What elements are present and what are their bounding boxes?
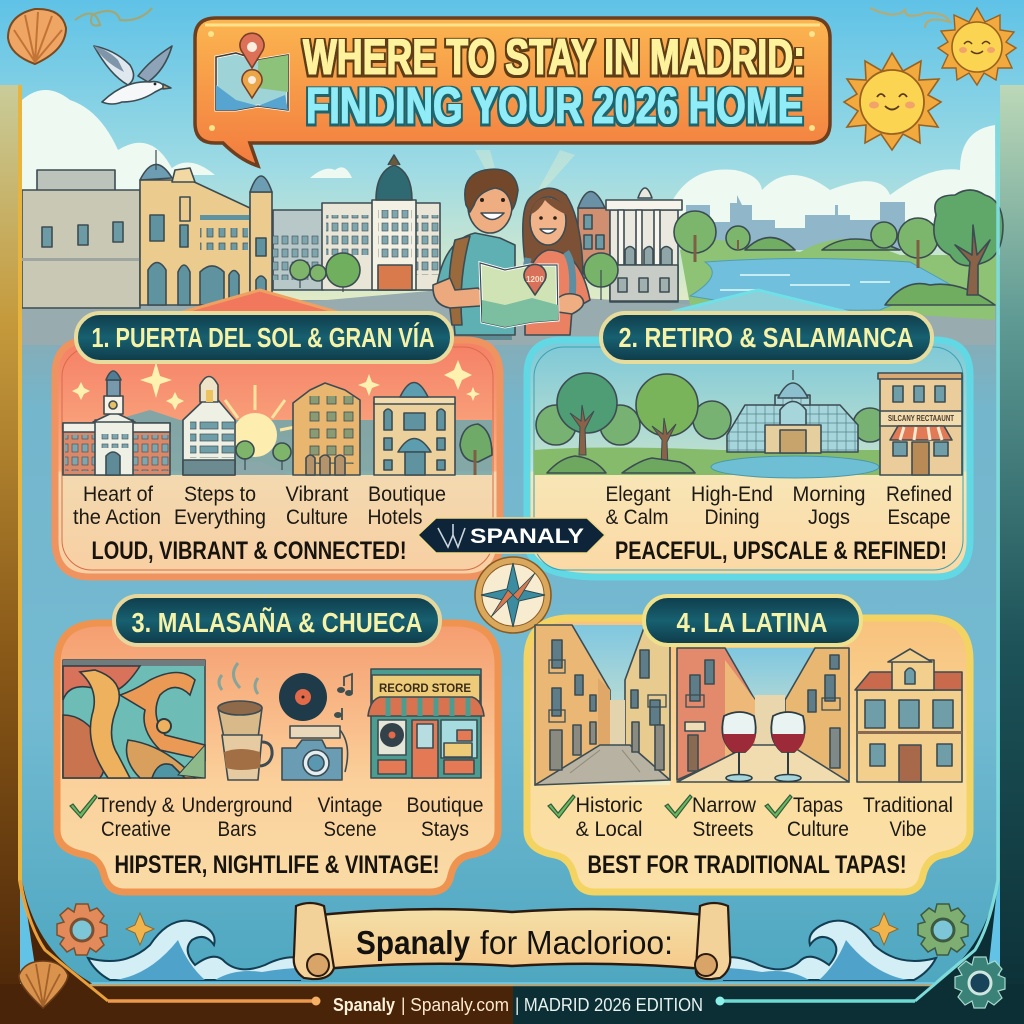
heading pill: 1. PUERTA DEL SOL & GRAN VÍA [92,322,434,353]
sun rays behind couple [475,150,575,205]
vinyl record [279,673,327,721]
brand name: SPANALY [470,525,584,548]
held map: 1200 [526,275,544,284]
man [433,169,518,340]
compass [475,557,551,633]
scroll text: for Maclorioo: [480,924,673,961]
heading pill [76,313,452,362]
feature labels: Everything [174,506,266,529]
feature labels: Boutique [406,794,484,817]
gear bottom right [955,957,1005,1008]
heading pill: 3. MALASAÑA & CHUECA [132,607,422,638]
held map [480,263,558,327]
street scene 2 [677,648,849,782]
feature labels [73,483,446,529]
panel 4: La Latina [527,596,970,892]
scroll text [356,924,673,961]
feature labels: Stays [421,818,469,841]
music notes [334,674,353,720]
big park tree [934,190,1003,295]
footer text [333,995,703,1015]
traditional house [855,649,962,782]
footer text: Spanaly [333,995,395,1015]
feature labels: Bars [218,818,256,841]
verdict: HIPSTER, NIGHTLIFE & VINTAGE! [114,851,440,879]
tree by museum [584,253,618,300]
gear left [57,904,107,955]
landmark: Metropolis building [273,155,440,292]
feature labels [606,483,952,529]
landmark: brick building [578,192,610,278]
waves left [88,921,302,980]
wine glasses [722,712,805,782]
feature labels: Scene [324,818,376,841]
sparkles [72,360,480,410]
left outer frame strip [0,85,20,1024]
landmark: white museum [606,188,682,302]
feature labels: Trendy & [98,794,174,817]
heading pill: 2. RETIRO & SALAMANCA [618,322,914,353]
feature labels [70,794,484,841]
building: orange hotel [293,383,360,475]
clouds [22,90,995,240]
feature labels [548,794,953,841]
feature labels: Traditional [863,794,953,817]
building: Gran Via tower [183,376,235,475]
title line 2: FINDING YOUR 2026 HOME [306,77,803,134]
building: boutique hotel [374,382,455,475]
heading pill [644,596,861,645]
feature labels: Boutique [368,483,446,506]
street scene 1 [535,625,670,785]
footer text: | MADRID 2026 EDITION [515,995,703,1015]
couple holding map [433,169,590,340]
feature labels: & Calm [606,506,668,529]
park and lake [674,211,1000,310]
verdict: PEACEFUL, UPSCALE & REFINED! [615,537,947,565]
decorative swirl top left [75,8,152,26]
feature labels: Creative [101,818,171,841]
scallop shell bottom left [19,961,68,1008]
footer text: | Spanaly.com [401,995,509,1015]
scene: ground and road [22,255,995,345]
small smiling sun [938,8,1016,85]
woman [520,188,590,335]
feature labels: Vibe [890,818,926,841]
feature labels: Culture [787,818,849,841]
title line 1: WHERE TO STAY IN MADRID: [303,29,805,85]
cyan frame line right [915,115,998,1001]
verdict: LOUD, VIBRANT & CONNECTED! [92,537,406,565]
feature labels: Dining [704,506,760,529]
gold frame line left [20,85,105,1001]
building: Casa de Correos [63,371,170,475]
icon: map with pins [216,33,288,110]
feature labels: Jogs [808,506,850,529]
lower body background [22,300,1000,982]
feature labels: Vibrant [286,483,349,506]
scroll text: Spanaly [356,924,471,961]
feature labels: Steps to [184,483,256,506]
landmark: yellow corner building [140,150,272,305]
sky background [0,0,1024,340]
feature labels: the Action [73,506,161,529]
gear right [918,904,968,955]
record store: RECORD STORE [379,681,471,695]
feature labels: High-End [691,483,773,506]
star left [126,913,154,945]
feature labels: Morning [792,483,866,506]
star right [870,913,898,945]
verdict: BEST FOR TRADITIONAL TAPAS! [588,851,906,879]
panel 1: Puerta del Sol and Gran Via [55,290,500,577]
panel 3: Malasana and Chueca [57,596,498,892]
right outer frame strip [1000,85,1024,1024]
restaurant: SILCANY RECTAAUNT [888,414,954,423]
waves right [722,921,936,980]
feature labels: Culture [286,506,348,529]
seagull [94,46,172,104]
feature labels: Elegant [606,483,671,506]
tree [460,424,492,475]
feature labels: Hotels [368,506,422,529]
illustration: city landmarks [63,360,492,475]
landmark: grey palace [22,170,140,308]
feature labels: Tapas [793,794,843,817]
decorative swirl top right [870,8,950,28]
bottom bar [0,880,1024,1024]
feature labels: Escape [888,506,950,529]
heading pill [601,313,932,362]
distant skyline [686,195,905,250]
title banner [195,18,830,166]
mural [63,660,205,778]
palacio de cristal [727,370,858,453]
illustration: Retiro park [534,370,962,478]
heading pill: 4. LA LATINA [676,607,828,638]
feature labels: Narrow [692,794,757,817]
camera [282,726,348,780]
street trees [236,441,291,470]
parchment scroll banner [294,903,730,979]
scallop shell top left [8,9,66,64]
feature labels: Refined [886,483,952,506]
feature labels: Underground [182,794,292,817]
heading pill [114,596,440,645]
feature labels: Historic [576,794,642,817]
coffee cup [218,663,272,780]
feature labels: Vintage [318,794,382,817]
feature labels: Streets [692,818,754,841]
large smiling sun [844,53,941,150]
feature labels: Heart of [83,483,153,506]
feature labels: & Local [576,818,642,841]
panel 2: Retiro and Salamanca [527,290,970,577]
restaurant [878,373,962,475]
record store [368,669,484,778]
logo mark [438,524,465,547]
center brand badge [418,518,605,553]
